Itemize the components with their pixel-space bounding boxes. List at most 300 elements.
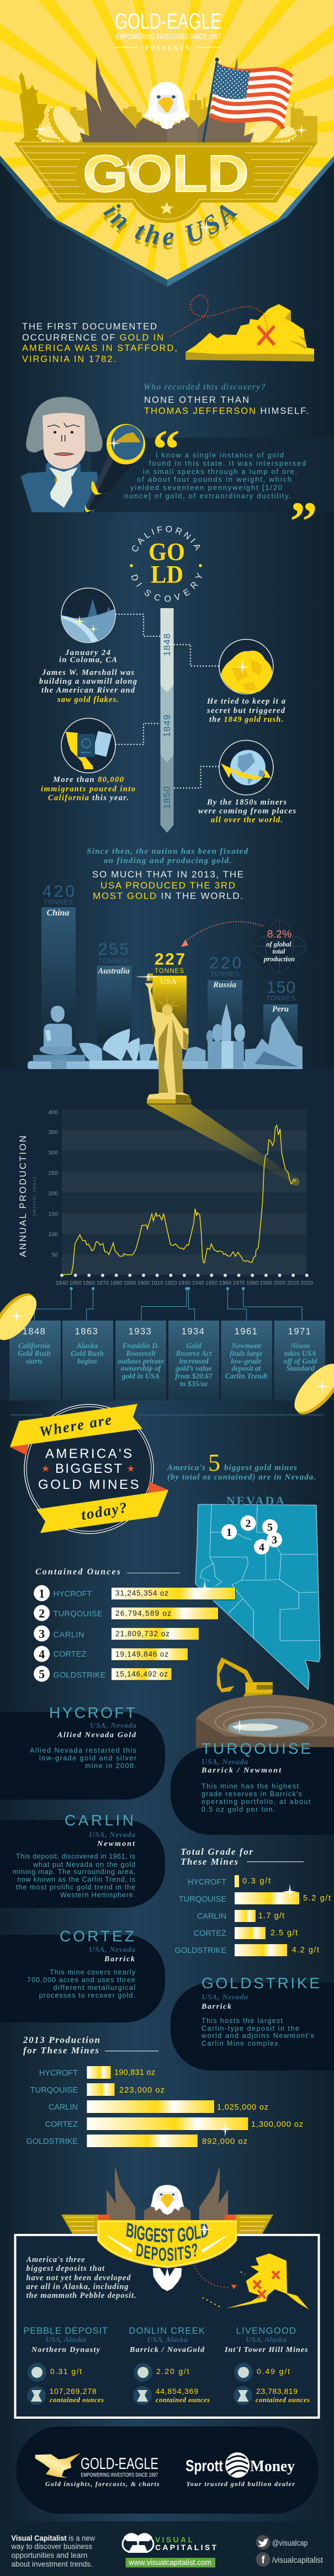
panel: carlin: CARLIN bbox=[65, 1812, 134, 1829]
2013 production chart: GOLDSTRIKE bbox=[26, 2137, 78, 2146]
excavator bbox=[217, 1657, 273, 1699]
contained ounces heading: Contained Ounces bbox=[35, 1567, 120, 1577]
bar: usa: TONNES bbox=[155, 968, 184, 975]
deposit: livengood: LIVENGOOD bbox=[236, 2326, 296, 2336]
annual production chart bbox=[18, 1104, 313, 1286]
milestone: 1971: takes USA bbox=[284, 1349, 316, 1358]
circle: passports and california bbox=[61, 718, 115, 773]
panel: carlin: what put Nevada on the gold bbox=[33, 1861, 135, 1869]
milestone: 1863 bbox=[62, 1321, 113, 1401]
panel: goldstrike: Barrick bbox=[201, 2003, 231, 2011]
sponsors pill: Money bbox=[250, 2458, 295, 2475]
annual production chart: 1880 bbox=[110, 1280, 123, 1286]
california gold discovery badge: LD bbox=[151, 560, 183, 588]
annual production chart: 50 bbox=[51, 1252, 58, 1258]
total grade chart: 5.2 g/t bbox=[303, 1894, 331, 1903]
footer about text: Visual Capitalist is a new bbox=[11, 2534, 96, 2542]
bar: russia: Russia bbox=[213, 981, 236, 989]
bar: australia: 255 bbox=[98, 940, 129, 959]
milestone: 1961: deposit at bbox=[232, 1364, 262, 1372]
deposit: donlin creek bbox=[129, 2326, 210, 2405]
total grade chart: 0.3 g/t bbox=[242, 1877, 271, 1886]
panel: goldstrike: Carlin Mine complex. bbox=[202, 2040, 280, 2047]
milestone: 1934: from $20.67 bbox=[175, 1372, 213, 1380]
milestone: 1961: Carlin Trendt bbox=[225, 1372, 268, 1380]
deposits intro: are all in Alaska, including bbox=[26, 2282, 128, 2291]
header blue edges bbox=[0, 156, 334, 287]
panel: turquoise: USA, Nevada bbox=[202, 1758, 248, 1766]
deposits intro: America's three bbox=[25, 2255, 85, 2264]
total grade chart bbox=[175, 1846, 331, 1957]
total grade chart: TURQOUISE bbox=[179, 1895, 226, 1904]
global share globe callout: 8.2% bbox=[267, 929, 291, 940]
milestone: 1971: Nixon bbox=[290, 1342, 310, 1350]
2013 production chart: TURQOUISE bbox=[30, 2086, 78, 2095]
quote panel: ” bbox=[290, 491, 317, 552]
deposit: livengood: 23,783,819 bbox=[256, 2387, 298, 2396]
panel: turquoise: This mine has the highest bbox=[202, 1782, 299, 1790]
milestone: 1934: increased bbox=[179, 1357, 209, 1365]
header skyline and statue silhouette bbox=[19, 72, 317, 142]
third most gold text: MOST GOLD IN THE WORLD. bbox=[93, 891, 243, 901]
nevada map: 1 bbox=[226, 1526, 232, 1539]
flat lower panel bbox=[0, 1069, 334, 1400]
panel: hycroft: mine in 2008. bbox=[85, 1762, 136, 1770]
red tabs bbox=[98, 2215, 236, 2221]
milestone: 1961: 1961 bbox=[235, 1327, 258, 1337]
panel: turquoise: grade reserves in Barrick's bbox=[202, 1790, 302, 1798]
bar: peru: Peru bbox=[272, 1005, 289, 1014]
deposits intro: have not yet been developed bbox=[26, 2274, 131, 2282]
deposit: pebble: 107,269,278 bbox=[50, 2387, 97, 2396]
title: GOLD: GOLD bbox=[83, 145, 249, 203]
deposit: donlin creek: DONLIN CREEK bbox=[129, 2326, 205, 2336]
deposit: livengood: USA, Alaska bbox=[246, 2336, 287, 2344]
quote panel: ounce] of gold, of extraordinary ductility. bbox=[124, 492, 291, 500]
gold coin right bbox=[287, 1357, 334, 1422]
milestone: 1863: Alaska bbox=[76, 1342, 98, 1350]
buddha bbox=[33, 1006, 85, 1069]
panel: turquoise: Barrick / Newmont bbox=[201, 1766, 282, 1775]
panel: goldstrike: Carlin-type deposit in the bbox=[202, 2025, 299, 2032]
banner star bbox=[160, 202, 173, 214]
footer bar bbox=[0, 2521, 334, 2576]
milestone: 1934: Gold bbox=[187, 1342, 202, 1350]
shield banner: DEPOSITS? bbox=[136, 2243, 197, 2261]
panel: hycroft: HYCROFT bbox=[49, 1704, 135, 1721]
panel: cortez: 700,000 acres and uses three bbox=[27, 1976, 135, 1984]
deposit: livengood: 0.49 g/t bbox=[257, 2367, 290, 2376]
panel: hycroft bbox=[0, 1704, 165, 1800]
annual production chart: 250 bbox=[48, 1170, 58, 1177]
global share globe callout bbox=[253, 920, 306, 973]
bar: peru: 150 bbox=[267, 978, 295, 997]
quote panel: “ bbox=[152, 418, 180, 480]
milestone: 1933: gold in USA bbox=[121, 1372, 160, 1380]
panel: cortez: This mine covers nearly bbox=[50, 1968, 136, 1976]
nevada map: 5 bbox=[267, 1521, 273, 1534]
five biggest mines text bbox=[167, 1449, 316, 1482]
eagle: deposits bbox=[107, 2166, 228, 2291]
annual production chart: 200 bbox=[48, 1190, 58, 1197]
2013 production chart: 1,300,000 oz bbox=[251, 2120, 303, 2129]
total grade chart: 4.2 g/t bbox=[292, 1946, 319, 1955]
annual production chart: 150 bbox=[48, 1211, 58, 1217]
social links: f bbox=[261, 2554, 265, 2566]
miners text: all over the world. bbox=[211, 816, 283, 824]
monuments bbox=[28, 1003, 303, 1069]
2013 production chart: CORTEZ bbox=[45, 2120, 78, 2129]
quote panel: yielded seventeen pennyweight [1/20 bbox=[130, 483, 282, 492]
annual production chart: 300 bbox=[48, 1149, 58, 1156]
header eagle bbox=[80, 57, 253, 142]
milestone: 1848: Gold Rush bbox=[18, 1349, 51, 1358]
badge: where are america's biggest gold mines: AMERICA'S bbox=[45, 1446, 132, 1461]
total grade chart: 2.5 g/t bbox=[271, 1929, 298, 1938]
visual capitalist logo: www.visualcapitalist.com bbox=[128, 2558, 211, 2567]
title: in the USA: in the USA bbox=[103, 204, 237, 249]
timeline bar: 1850 bbox=[162, 786, 172, 809]
milestone: 1934: gold’s value bbox=[175, 1364, 212, 1372]
annual production chart: ANNUAL PRODUCTION bbox=[18, 1136, 28, 1257]
telescope bbox=[84, 424, 145, 514]
panel: turquoise: operating portfolio, at about bbox=[202, 1798, 311, 1806]
sponsors pill: Your trusted gold bullion dealer bbox=[187, 2480, 295, 2488]
annual production chart: 1940 bbox=[192, 1280, 204, 1286]
milestone: 1961: Newmont bbox=[231, 1342, 262, 1350]
panel: goldstrike bbox=[171, 1974, 334, 2071]
opera house bbox=[79, 1029, 157, 1069]
milestone: 1971: Standard bbox=[286, 1364, 315, 1372]
sponsors pill: GOLD-EAGLE bbox=[81, 2455, 158, 2473]
contained ounces chart: CORTEZ bbox=[53, 1650, 87, 1659]
ground bbox=[28, 1061, 303, 1069]
badge: where are america's biggest gold mines: BIGGEST bbox=[55, 1461, 122, 1476]
milestone: 1934: Reserve Act bbox=[175, 1349, 213, 1358]
bar: australia bbox=[97, 940, 131, 1043]
first occurrence text bbox=[22, 322, 177, 364]
header brand text: GOLD-EAGLE bbox=[115, 9, 221, 34]
annual production chart: 1860 bbox=[83, 1280, 96, 1286]
california gold discovery badge: DISCOVERY bbox=[129, 572, 205, 604]
january text bbox=[39, 648, 137, 704]
bar: china bbox=[41, 882, 76, 1040]
global share globe callout: production bbox=[263, 955, 295, 963]
milestone: 1934 bbox=[168, 1321, 219, 1401]
header coins right bbox=[247, 102, 308, 149]
machu picchu bbox=[183, 1015, 303, 1068]
header brand text bbox=[113, 9, 221, 52]
immigrants text bbox=[41, 775, 135, 802]
jefferson heading: NONE OTHER THAN bbox=[144, 395, 249, 405]
bar: russia: 220 bbox=[209, 954, 241, 972]
deposit: pebble: contained ounces bbox=[50, 2396, 104, 2404]
panel: carlin bbox=[0, 1812, 165, 1908]
january text: the American River and bbox=[41, 686, 135, 695]
panel: carlin: Western Hemisphere. bbox=[60, 1891, 135, 1899]
panel: goldstrike: USA, Nevada bbox=[202, 1993, 248, 2002]
statue of liberty bbox=[136, 973, 191, 1104]
annual production chart: 1840 bbox=[56, 1280, 68, 1286]
sponsors pill: Sprott bbox=[185, 2457, 223, 2475]
total grade chart: Total Grade for bbox=[181, 1846, 253, 1857]
january text: building a sawmill along bbox=[39, 677, 137, 686]
annual production chart: 1850 bbox=[70, 1280, 82, 1286]
total grade chart: HYCROFT bbox=[188, 1878, 226, 1887]
immigrants text: California this year. bbox=[48, 794, 129, 802]
milestone: 1961: finds large bbox=[230, 1349, 263, 1358]
panel: cortez: CORTEZ bbox=[60, 1928, 134, 1945]
2013 production chart bbox=[23, 2035, 303, 2148]
total grade chart: CORTEZ bbox=[194, 1929, 226, 1938]
five biggest mines text: America's bbox=[167, 1463, 205, 1472]
panel: cortez: different metallurgical bbox=[53, 1984, 135, 1992]
header coins left bbox=[33, 102, 86, 149]
2013 production chart: CARLIN bbox=[49, 2103, 78, 2112]
total grade chart: GOLDSTRIKE bbox=[175, 1946, 226, 1955]
contained ounces chart: 15,146,492 oz bbox=[115, 1670, 168, 1678]
circle: sawmill landscape bbox=[61, 588, 119, 646]
bar: usa: 227 bbox=[155, 950, 185, 968]
total grade chart: These Mines bbox=[181, 1856, 238, 1867]
2013 production chart: for These Mines bbox=[23, 2045, 99, 2056]
january text: James W. Marshall was bbox=[41, 668, 134, 677]
quote panel: of about four pounds in weight, which bbox=[137, 475, 291, 483]
panel: cortez: processes to recover gold. bbox=[39, 1992, 135, 1999]
2013 production chart: 223,000 oz bbox=[119, 2086, 165, 2095]
miners text: By the 1850s miners bbox=[206, 798, 287, 807]
immigrants text: immigrants poured into bbox=[41, 785, 135, 794]
open pit mine bbox=[196, 1695, 334, 1748]
bar: australia: Australia bbox=[97, 967, 130, 976]
five biggest mines text: (by total oz contained) are in Nevada. bbox=[167, 1473, 316, 1482]
annual production chart: (metric tons) bbox=[31, 1176, 38, 1217]
visual capitalist logo: VISUAL bbox=[155, 2535, 193, 2544]
quote panel: I know a single instance of gold bbox=[156, 451, 284, 459]
footer about text: way to discover business bbox=[10, 2542, 92, 2551]
sponsors pill: Gold insights, forecasts, & charts bbox=[45, 2480, 160, 2488]
circle: passports and california: PASSPORT bbox=[81, 752, 92, 754]
milestone: 1961: low-grade bbox=[231, 1357, 262, 1365]
bar: china: TONNES bbox=[44, 900, 73, 906]
footer about text bbox=[10, 2534, 96, 2568]
milestone: 1933: 1933 bbox=[129, 1327, 152, 1337]
milestone: 1971: off of Gold bbox=[284, 1357, 317, 1365]
miners text bbox=[198, 798, 296, 824]
badge: where are america's biggest gold mines: today? bbox=[80, 1499, 129, 1523]
bar: australia: TONNES bbox=[98, 958, 128, 965]
annual production chart: 2020 bbox=[301, 1280, 313, 1286]
bar: usa bbox=[152, 950, 187, 1036]
deposit: pebble: PEBBLE DEPOSIT bbox=[23, 2326, 108, 2336]
panel: turquoise: 0.5 oz gold per ton. bbox=[202, 1806, 275, 1813]
deposits frame bbox=[15, 2235, 319, 2418]
panel: carlin: This deposit, discovered in 1961, is bbox=[16, 1853, 135, 1860]
badge: where are america's biggest gold mines: ★ bbox=[126, 1463, 135, 1474]
milestone: 1971: 1971 bbox=[288, 1327, 311, 1337]
annual production chart: 1950 bbox=[205, 1280, 218, 1286]
contained ounces chart: 2 bbox=[39, 1606, 45, 1620]
deposit: donlin creek: Barrick / NovaGold bbox=[129, 2346, 205, 2354]
deposit: pebble: Northern Dynasty bbox=[31, 2346, 100, 2354]
badge: where are america's biggest gold mines: Where are bbox=[38, 1411, 114, 1440]
deposit: donlin creek: contained ounces bbox=[156, 2396, 210, 2404]
milestone: 1848: starts bbox=[25, 1357, 43, 1365]
california gold discovery badge: CALIFORNIA bbox=[132, 526, 200, 552]
quote panel: in small specks through a lump of ore, bbox=[143, 467, 297, 476]
annual production chart: 1910 bbox=[151, 1280, 163, 1286]
deposit: donlin creek: 2.20 g/t bbox=[156, 2367, 189, 2376]
annual production chart: 1930 bbox=[178, 1280, 190, 1286]
third most gold text: SO MUCH THAT IN 2013, THE bbox=[92, 869, 243, 880]
bar: russia bbox=[208, 954, 242, 1046]
bar: usa: USA bbox=[160, 977, 177, 986]
panel: carlin: USA, Nevada bbox=[89, 1831, 135, 1839]
panel: carlin: the most prolific gold trend in the bbox=[16, 1883, 135, 1891]
jefferson heading: THOMAS JEFFERSON HIMSELF. bbox=[144, 406, 309, 416]
footer about text: opportunities and learn bbox=[11, 2551, 87, 2559]
panel: goldstrike: world and adjoins Newmont's bbox=[201, 2032, 314, 2040]
panel: turquoise bbox=[171, 1740, 334, 1835]
third most gold text bbox=[87, 847, 248, 901]
milestone: 1933: Roosevelt bbox=[125, 1349, 156, 1358]
header sunburst bbox=[0, 0, 334, 280]
gold rush text: secret but triggered bbox=[206, 706, 285, 715]
quote panel: found in this state. It was interspersed bbox=[149, 459, 306, 467]
annual production chart: 1900 bbox=[137, 1280, 150, 1286]
sponsors pill bbox=[16, 2426, 319, 2514]
kremlin bbox=[206, 1003, 245, 1068]
milestone: 1848: California bbox=[18, 1342, 50, 1350]
contained ounces chart: 26,794,589 oz bbox=[115, 1609, 171, 1617]
panel: hycroft: low-grade gold and silver bbox=[39, 1754, 136, 1762]
milestone: 1971 bbox=[274, 1321, 325, 1401]
milestone: 1933 bbox=[115, 1321, 166, 1401]
nevada map: NEVADA bbox=[226, 1494, 284, 1508]
bar: russia: TONNES bbox=[210, 971, 240, 978]
annual production chart: 2010 bbox=[287, 1280, 300, 1286]
2013 production chart: 892,000 oz bbox=[202, 2137, 247, 2146]
california gold discovery badge: GO bbox=[149, 537, 185, 566]
2013 production chart: 190,831 oz bbox=[114, 2068, 155, 2077]
american flag bbox=[203, 57, 292, 142]
bar: china: 420 bbox=[43, 882, 75, 901]
annual production chart: 1870 bbox=[97, 1280, 109, 1286]
badge: where are america's biggest gold mines bbox=[10, 1404, 168, 1534]
contained ounces chart: 5 bbox=[39, 1667, 45, 1681]
timeline bar: 1848 bbox=[162, 633, 172, 656]
panel: turquoise: TURQOUISE bbox=[202, 1740, 311, 1757]
light beam from statue bbox=[147, 1104, 298, 1183]
january text: January 24 bbox=[65, 648, 110, 657]
jefferson heading: Who recorded this discovery? bbox=[144, 382, 265, 392]
bar: china: China bbox=[47, 908, 69, 918]
annual production chart: 1990 bbox=[260, 1280, 272, 1286]
deposit: donlin creek: USA, Alaska bbox=[147, 2336, 188, 2344]
deposit: livengood bbox=[224, 2326, 310, 2405]
banner wings bbox=[14, 142, 317, 223]
contained ounces chart: 31,245,354 oz bbox=[115, 1589, 168, 1597]
milestone: 1863: begins bbox=[77, 1357, 97, 1365]
panel: carlin: mining map. The surrounding area, bbox=[13, 1868, 135, 1876]
total grade chart: CARLIN bbox=[197, 1912, 226, 1921]
panel: hycroft: Allied Nevada Gold bbox=[57, 1731, 136, 1739]
header brand text: PRESENTS bbox=[145, 44, 189, 52]
annual production chart: 350 bbox=[48, 1129, 58, 1136]
contained ounces chart: GOLDSTRIKE bbox=[53, 1671, 106, 1680]
contained ounces chart: CARLIN bbox=[53, 1631, 84, 1640]
milestone: 1934: 1934 bbox=[182, 1327, 205, 1337]
annual production chart: 1960 bbox=[219, 1280, 231, 1286]
2013 production chart: 1,025,000 oz bbox=[217, 2103, 268, 2112]
california gold discovery badge bbox=[129, 526, 205, 604]
social links: /visualcapitalist bbox=[272, 2556, 323, 2565]
contained ounces chart: TURQOUISE bbox=[53, 1610, 103, 1619]
milestone: 1934: to $35/oz bbox=[180, 1380, 208, 1388]
milestone: 1933: ownership of bbox=[121, 1364, 162, 1372]
contained ounces chart bbox=[34, 1580, 236, 1682]
badge: where are america's biggest gold mines: ★ bbox=[41, 1463, 50, 1474]
deposit: donlin creek: 44,854,369 bbox=[156, 2387, 198, 2396]
deposit: pebble: USA, Alaska bbox=[45, 2336, 86, 2344]
first occurrence text: THE FIRST DOCUMENTED bbox=[22, 322, 157, 332]
panel: hycroft: USA, Nevada bbox=[90, 1722, 136, 1730]
miners text: were coming from places bbox=[198, 807, 296, 816]
visual capitalist logo bbox=[123, 2533, 216, 2567]
gold coin left bbox=[0, 1286, 44, 1346]
first occurrence text: OCCURRENCE OF GOLD IN bbox=[22, 333, 163, 343]
sponsors pill: EMPOWERING INVESTORS SINCE 1997 bbox=[81, 2472, 158, 2478]
milestone: 1961 bbox=[221, 1321, 272, 1401]
deposit: livengood: contained ounces bbox=[256, 2396, 310, 2404]
five biggest mines text: biggest gold mines bbox=[224, 1463, 297, 1472]
annual production chart: 1890 bbox=[124, 1280, 136, 1286]
social links: @visualcap bbox=[272, 2539, 308, 2548]
total grade chart: 1.7 g/t bbox=[258, 1912, 284, 1920]
nevada map: 3 bbox=[272, 1534, 277, 1546]
annual production chart: 1980 bbox=[246, 1280, 259, 1286]
immigrants text: More than 80,000 bbox=[52, 775, 124, 784]
nevada map bbox=[195, 1494, 320, 1690]
annual production chart: 1970 bbox=[232, 1280, 245, 1286]
milestone: 1863: Gold Rush bbox=[71, 1349, 104, 1358]
global share globe callout: total bbox=[273, 948, 285, 955]
january text: saw gold flakes. bbox=[57, 695, 119, 704]
milestone: 1848 bbox=[9, 1321, 61, 1401]
visual capitalist logo: CAPITALIST bbox=[155, 2543, 216, 2552]
deposit: pebble: 0.31 g/t bbox=[50, 2367, 82, 2376]
shield banner: BIGGEST GOLD bbox=[126, 2223, 208, 2243]
header brand text: EMPOWERING INVESTORS SINCE 1997 bbox=[116, 32, 221, 41]
shield banner bbox=[97, 2220, 237, 2268]
thomas jefferson portrait bbox=[20, 397, 103, 512]
footer about text: about investment trends. bbox=[11, 2559, 93, 2568]
badge: where are america's biggest gold mines: GOLD MINES bbox=[38, 1477, 139, 1492]
alaska map bbox=[194, 2253, 309, 2309]
jefferson heading bbox=[144, 382, 309, 416]
circle: gold nugget bbox=[219, 639, 273, 694]
nevada map: 2 bbox=[245, 1518, 251, 1530]
panel: cortez bbox=[0, 1928, 165, 2023]
milestone: 1848: 1848 bbox=[23, 1327, 46, 1337]
january text: in Coloma, CA bbox=[59, 656, 117, 664]
dotted arrow bbox=[181, 922, 263, 947]
annual production chart: 400 bbox=[48, 1109, 58, 1116]
nevada map: 4 bbox=[259, 1541, 264, 1553]
quote panel bbox=[91, 418, 334, 552]
bar: peru bbox=[263, 978, 298, 1049]
panel: goldstrike: This hosts the largest bbox=[202, 2017, 283, 2025]
